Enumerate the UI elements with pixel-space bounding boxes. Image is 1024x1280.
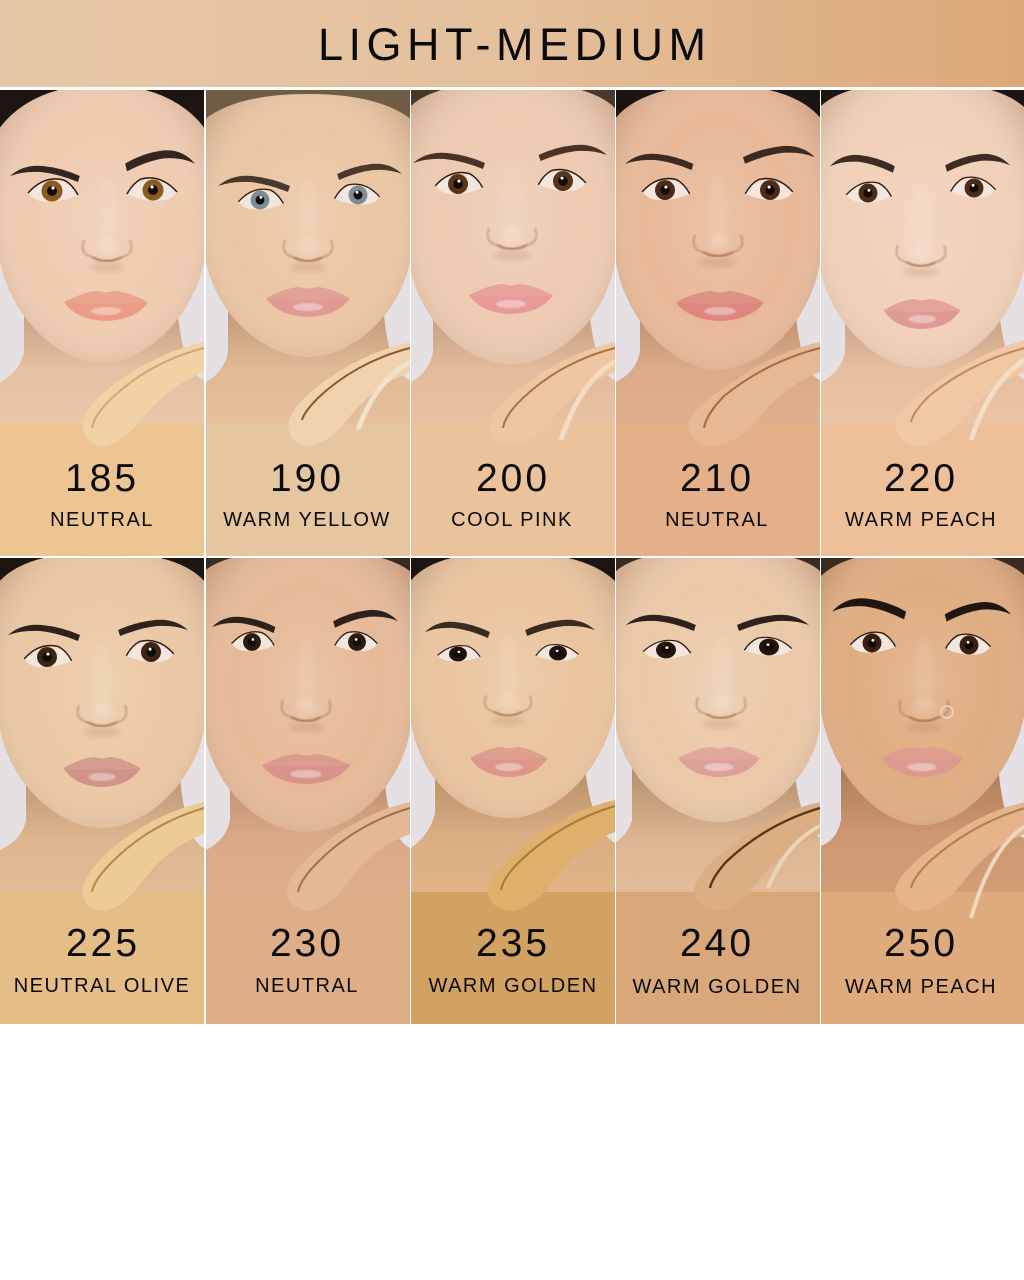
product swatch bbox=[288, 342, 410, 446]
product swatch bbox=[487, 800, 615, 911]
shade number: 235 bbox=[476, 922, 550, 965]
shade number: 250 bbox=[884, 922, 958, 965]
shade number: 220 bbox=[884, 457, 958, 500]
colour band bbox=[616, 892, 820, 1024]
product swatch bbox=[694, 802, 820, 911]
shade label: WARM PEACH bbox=[845, 509, 997, 531]
product swatch bbox=[688, 342, 820, 446]
colour band bbox=[821, 424, 1024, 556]
product swatch bbox=[82, 342, 204, 446]
shade label: WARM YELLOW bbox=[223, 509, 391, 531]
shade number: 225 bbox=[66, 922, 140, 965]
panel: shade 235 bbox=[409, 552, 617, 1024]
product swatch bbox=[286, 802, 410, 911]
panel: shade 185 bbox=[0, 84, 206, 556]
colour band bbox=[616, 424, 820, 556]
colour band bbox=[0, 892, 204, 1024]
product swatch bbox=[82, 802, 204, 911]
shade label: NEUTRAL bbox=[50, 509, 154, 531]
colour band bbox=[821, 892, 1024, 1024]
colour band bbox=[0, 424, 204, 556]
colour band bbox=[411, 424, 615, 556]
shade number: 210 bbox=[680, 457, 754, 500]
panel: shade 190 bbox=[204, 90, 412, 556]
shade number: 190 bbox=[270, 457, 344, 500]
panel: shade 240 bbox=[614, 550, 822, 1024]
header banner bbox=[0, 0, 1024, 87]
panel: shade 230 bbox=[202, 550, 412, 1024]
colour band bbox=[206, 892, 410, 1024]
panel: shade 200 bbox=[407, 82, 617, 556]
colour band bbox=[411, 892, 615, 1024]
title: LIGHT-MEDIUM bbox=[318, 19, 706, 70]
shade label: NEUTRAL bbox=[665, 509, 769, 531]
shade number: 240 bbox=[680, 922, 754, 965]
product swatch bbox=[895, 340, 1024, 446]
panel: shade 220 bbox=[817, 82, 1024, 556]
shade number: 230 bbox=[270, 922, 344, 965]
colour band bbox=[206, 424, 410, 556]
shade number: 200 bbox=[476, 457, 550, 500]
panel: shade 210 bbox=[614, 84, 822, 556]
shade number: 185 bbox=[65, 457, 139, 500]
product swatch bbox=[489, 342, 615, 446]
shade label: WARM PEACH bbox=[845, 976, 997, 998]
shade label: NEUTRAL OLIVE bbox=[14, 975, 190, 997]
panel: shade 225 bbox=[0, 552, 206, 1024]
shade label: NEUTRAL bbox=[255, 975, 359, 997]
product swatch bbox=[895, 802, 1024, 918]
shade label: COOL PINK bbox=[451, 509, 573, 531]
shade label: WARM GOLDEN bbox=[428, 975, 598, 997]
shade label: WARM GOLDEN bbox=[632, 976, 802, 998]
icon: nose ring bbox=[941, 706, 953, 718]
panel: shade 250 bbox=[819, 550, 1024, 1024]
